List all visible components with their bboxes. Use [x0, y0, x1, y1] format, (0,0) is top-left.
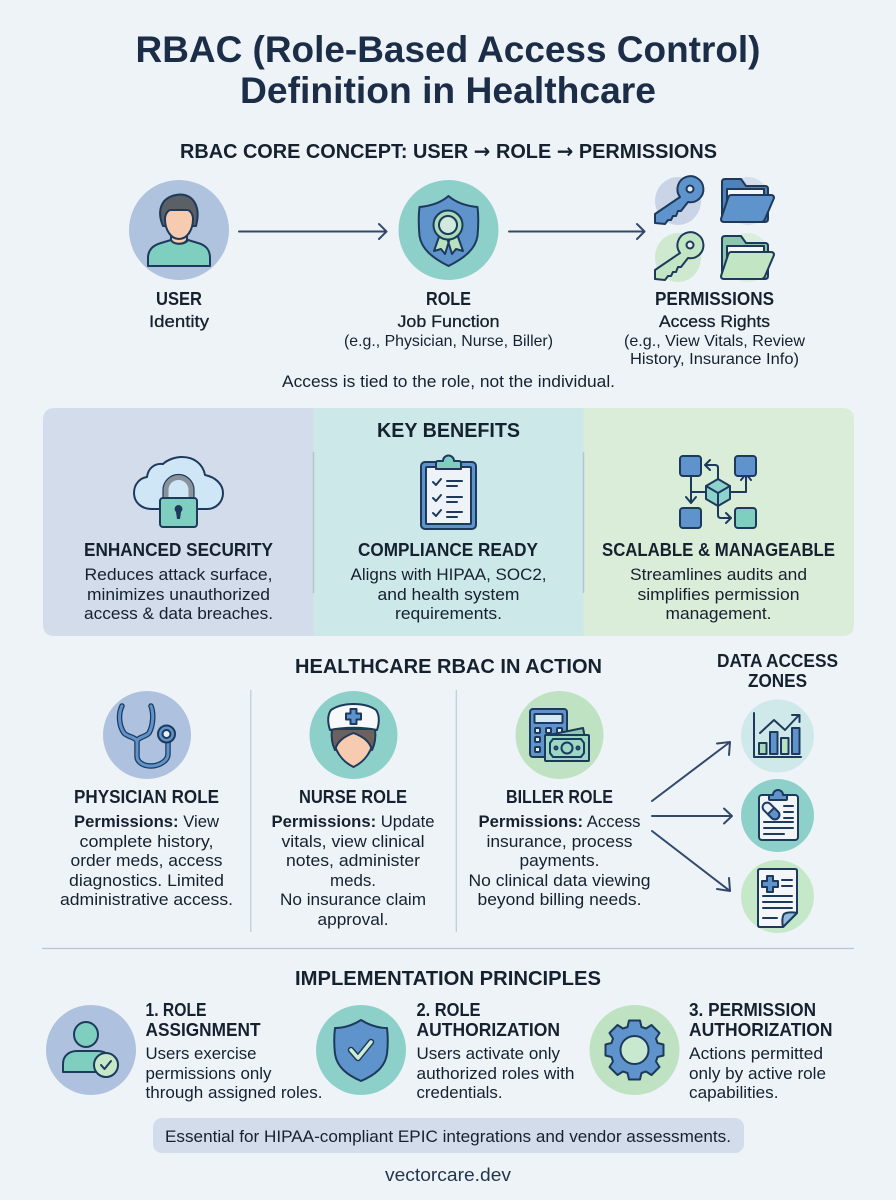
- text: user label: [149, 289, 210, 331]
- icon: analytics zone: [741, 700, 814, 772]
- text: permission authorization: 3. PERMISSION: [689, 1000, 816, 1020]
- text: role label: [344, 289, 553, 350]
- text: nurse role: meds.: [330, 871, 376, 890]
- text: physician role: order meds, access: [70, 851, 222, 870]
- title: [136, 28, 760, 111]
- heading: data access zones: ZONES: [748, 671, 807, 691]
- text: enhanced security: Reduces attack surface,: [84, 565, 272, 584]
- text: nurse role: notes, administer: [286, 851, 420, 870]
- text: scalable and manageable: management.: [666, 604, 772, 623]
- text: biller role: Permissions: Access: [478, 812, 640, 831]
- divider: [42, 948, 854, 950]
- panel: key benefits: [43, 408, 854, 636]
- text: physician role: [60, 787, 233, 909]
- text: nurse role: NURSE ROLE: [299, 787, 407, 807]
- heading: data access zones: [717, 651, 838, 691]
- text: scalable and manageable: SCALABLE & MANAGEABLE: [602, 540, 835, 560]
- text: role authorization: 2. ROLE: [416, 1000, 480, 1020]
- text: nurse role: Permissions: Update: [272, 812, 434, 831]
- text: scalable and manageable: simplifies permission: [638, 585, 800, 604]
- icon: compliance clipboard: [421, 456, 476, 529]
- text: role label: Job Function: [398, 312, 500, 331]
- text: nurse role: approval.: [318, 910, 388, 929]
- icon: permission keys and folders: [655, 176, 774, 282]
- icon: nurse: [310, 691, 398, 779]
- text: role assignment: Users exercise: [146, 1044, 256, 1063]
- text: nurse role: vitals, view clinical: [282, 832, 424, 851]
- heading: implementation principles: IMPLEMENTATION PRINCIPLES: [295, 968, 601, 990]
- text: compliance ready: requirements.: [395, 604, 502, 623]
- text: permission authorization: only by active role: [689, 1064, 826, 1083]
- text: biller role: payments.: [520, 851, 600, 870]
- text: role authorization: authorized roles with: [416, 1064, 574, 1083]
- text: compliance ready: Aligns with HIPAA, SOC2,: [350, 565, 546, 584]
- panel: core concept flow: [129, 176, 805, 391]
- text: compliance ready: [350, 540, 546, 623]
- title: RBAC (Role-Based Access Control): [136, 28, 760, 70]
- text: permission authorization: AUTHORIZATION: [689, 1020, 832, 1040]
- icon: calculator and money: [516, 691, 604, 779]
- text: physician role: administrative access.: [60, 890, 233, 909]
- text: role assignment: ASSIGNMENT: [146, 1020, 260, 1040]
- text: enhanced security: access & data breaches.: [84, 604, 273, 623]
- text: nurse role: [272, 787, 434, 929]
- text: biller role: [468, 787, 650, 909]
- arrow: role to permissions: [509, 224, 644, 239]
- heading: data access zones: DATA ACCESS: [717, 651, 838, 671]
- text: role authorization: [416, 1000, 574, 1102]
- arrows: biller role to data zones: [652, 742, 732, 891]
- text: biller role: No clinical data viewing: [468, 871, 650, 890]
- text: physician role: complete history,: [80, 832, 214, 851]
- icon: stethoscope: [103, 691, 191, 779]
- text: role label: ROLE: [426, 289, 471, 309]
- text: permission authorization: capabilities.: [689, 1083, 778, 1102]
- text: permissions label: (e.g., View Vitals, Review: [624, 333, 805, 350]
- text: permissions label: [624, 289, 805, 368]
- text: role authorization: Users activate only: [416, 1044, 560, 1063]
- text: user label: Identity: [149, 312, 210, 331]
- icon: medical record zone: [741, 860, 814, 933]
- text: permission authorization: [689, 1000, 832, 1102]
- panel: healthcare RBAC in action: [60, 651, 838, 933]
- heading: key benefits: KEY BENEFITS: [377, 420, 520, 442]
- icon: clinical clipboard zone: [741, 779, 814, 852]
- text: permissions label: Access Rights: [659, 312, 770, 331]
- icon: role assignment: [46, 1005, 136, 1095]
- text: enhanced security: ENHANCED SECURITY: [84, 540, 273, 560]
- text: role authorization: AUTHORIZATION: [416, 1020, 560, 1040]
- text: physician role: PHYSICIAN ROLE: [74, 787, 219, 807]
- text: nurse role: No insurance claim: [280, 890, 426, 909]
- icon: role shield: [398, 180, 498, 280]
- panel: implementation principles: [46, 968, 832, 1102]
- text: enhanced security: [84, 540, 273, 623]
- arrow: user to role: [239, 224, 386, 239]
- text: role assignment: through assigned roles.: [146, 1083, 322, 1102]
- heading: RBAC in action: HEALTHCARE RBAC IN ACTION: [295, 656, 602, 678]
- text: role assignment: [146, 1000, 322, 1102]
- text: permission authorization: Actions permitted: [689, 1044, 823, 1063]
- text: permissions label: History, Insurance Info): [630, 351, 799, 368]
- text: role assignment: permissions only: [146, 1064, 272, 1083]
- text: physician role: diagnostics. Limited: [69, 871, 224, 890]
- footer: website: vectorcare.dev: [385, 1165, 511, 1185]
- text: compliance ready: and health system: [378, 585, 520, 604]
- text: role assignment: 1. ROLE: [146, 1000, 206, 1020]
- icon: scalable network: [680, 456, 756, 528]
- text: user label: USER: [156, 289, 202, 309]
- callout: essential note: Essential for HIPAA-compliant EPIC integrations and vendor assessments.: [165, 1127, 731, 1146]
- text: scalable and manageable: [602, 540, 835, 623]
- title: Definition in Healthcare: [240, 69, 656, 111]
- icon: user: [129, 180, 229, 280]
- text: core concept note: Access is tied to the role, not the individual.: [282, 372, 615, 391]
- icon: role authorization shield: [316, 1005, 406, 1095]
- text: biller role: beyond billing needs.: [478, 890, 642, 909]
- text: biller role: insurance, process: [486, 832, 632, 851]
- text: permissions label: PERMISSIONS: [655, 289, 774, 309]
- icon: permission gear: [590, 1005, 680, 1095]
- text: enhanced security: minimizes unauthorized: [87, 585, 270, 604]
- text: role label: (e.g., Physician, Nurse, Biller): [344, 333, 553, 350]
- icon: cloud lock: [134, 457, 223, 527]
- heading: core concept: RBAC CORE CONCEPT: USER → ROLE → PERMISSIONS: [180, 139, 717, 163]
- text: biller role: BILLER ROLE: [506, 787, 613, 807]
- text: scalable and manageable: Streamlines audits and: [630, 565, 807, 584]
- text: compliance ready: COMPLIANCE READY: [358, 540, 538, 560]
- text: role authorization: credentials.: [416, 1083, 502, 1102]
- callout: essential note: [153, 1118, 744, 1153]
- text: physician role: Permissions: View: [74, 812, 220, 831]
